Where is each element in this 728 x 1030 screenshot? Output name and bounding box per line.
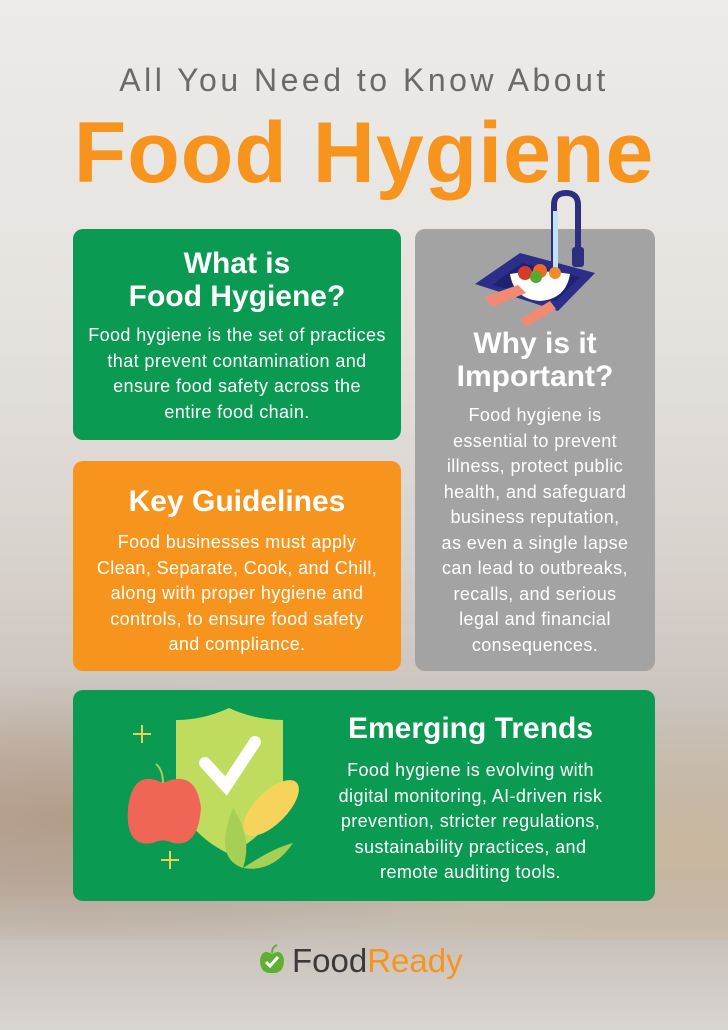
- panel: why is it important: essential to prevent: [453, 430, 617, 450]
- panel: emerging trends: [73, 690, 655, 901]
- icon: apple check: [260, 944, 284, 974]
- panel: why is it important: illness, protect public: [447, 456, 623, 476]
- panel: key guidelines: controls, to ensure food safety: [110, 608, 364, 628]
- icon: shield apple corn: [128, 708, 299, 869]
- panel: emerging trends: Food hygiene is evolving with: [347, 760, 594, 780]
- title: Food Hygiene: [74, 105, 654, 201]
- panel: key guidelines: Key Guidelines: [129, 485, 345, 518]
- panel: emerging trends: digital monitoring, AI-driven risk: [339, 786, 602, 806]
- panel: why is it important: business reputation,: [450, 507, 620, 527]
- panel: why is it important: can lead to outbreaks,: [442, 558, 628, 578]
- panel: key guidelines: along with proper hygiene and: [111, 583, 363, 603]
- panel: why is it important: health, and safeguard: [444, 482, 626, 502]
- panel: what is food hygiene: Food hygiene is the set of practices: [88, 325, 386, 345]
- icon: sink washing vegetables: [475, 190, 595, 327]
- panel: why is it important: legal and financial: [459, 609, 611, 629]
- panel: emerging trends: Emerging Trends: [348, 712, 593, 745]
- panel: why is it important: [415, 229, 655, 671]
- panel: emerging trends: sustainability practices, and: [355, 836, 586, 856]
- panel: why is it important: Food hygiene is: [468, 405, 602, 425]
- panel: what is food hygiene: ensure food safety across the: [113, 376, 361, 396]
- subtitle: All You Need to Know About: [119, 62, 609, 98]
- panel: emerging trends: prevention, stricter regulations,: [341, 811, 600, 831]
- panel: what is food hygiene: entire food chain.: [164, 402, 310, 422]
- panel: what is food hygiene: [73, 229, 401, 440]
- panel: why is it important: Why is it: [473, 327, 597, 360]
- panel: what is food hygiene: that prevent contamination and: [107, 350, 367, 370]
- panel: key guidelines: Clean, Separate, Cook, and Chill,: [97, 558, 377, 578]
- panel: what is food hygiene: What is: [184, 247, 290, 280]
- panel: what is food hygiene: Food Hygiene?: [129, 280, 345, 313]
- panel: why is it important: consequences.: [472, 634, 598, 654]
- panel: key guidelines: [73, 461, 401, 671]
- panel: why is it important: recalls, and serious: [453, 584, 617, 604]
- panel: emerging trends: remote auditing tools.: [380, 862, 561, 882]
- panel: key guidelines: and compliance.: [168, 634, 306, 654]
- panel: key guidelines: Food businesses must apply: [118, 532, 356, 552]
- panel: why is it important: as even a single lapse: [442, 532, 628, 552]
- panel: why is it important: Important?: [457, 360, 613, 393]
- logo: FoodReady: FoodReady: [292, 942, 463, 979]
